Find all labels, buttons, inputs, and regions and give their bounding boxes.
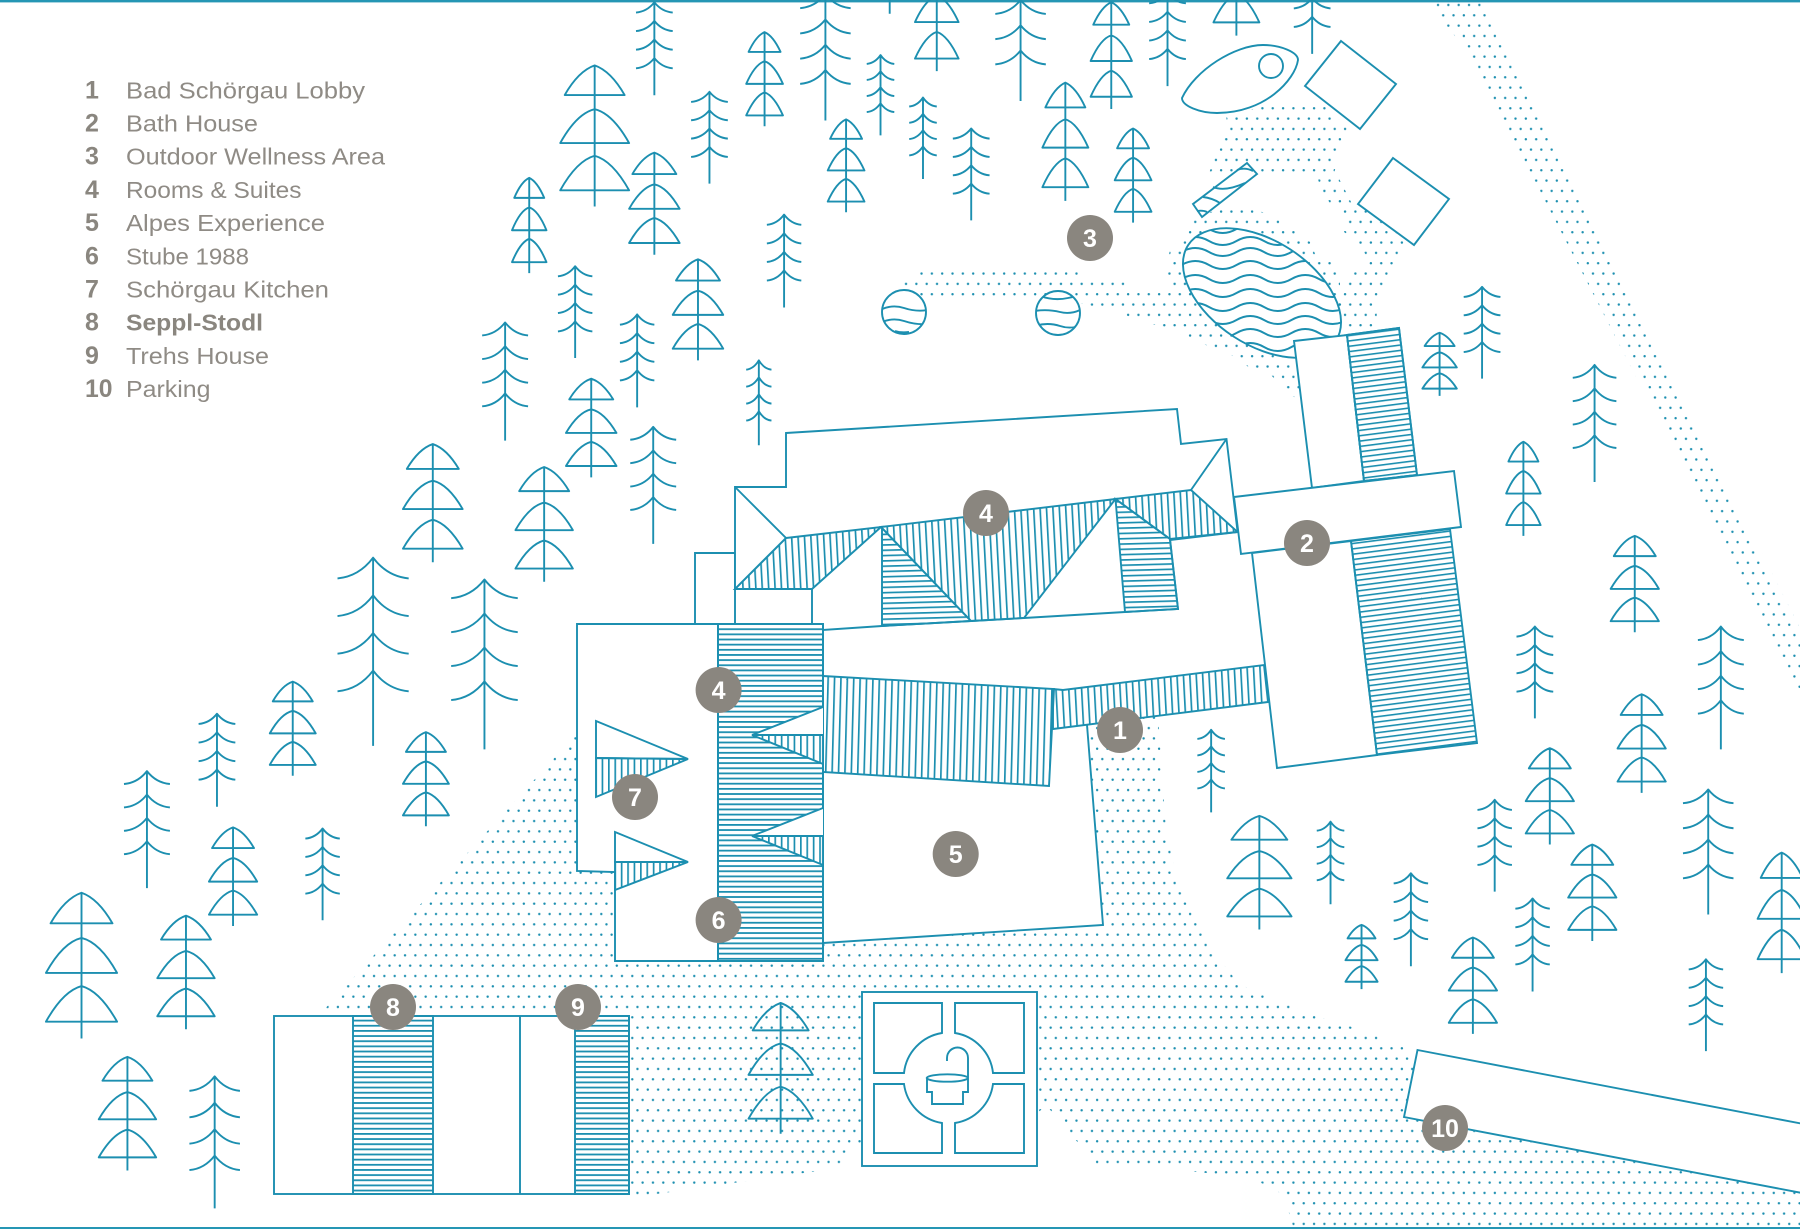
tree — [46, 893, 117, 1038]
hatched roof: west slope — [735, 527, 881, 589]
block outline — [274, 1016, 629, 1194]
tree — [1517, 627, 1553, 718]
tree — [673, 259, 723, 360]
icon: swimming pool with waves — [1182, 227, 1342, 359]
tree — [1515, 898, 1550, 991]
tree — [1683, 789, 1733, 915]
dotted path: lawn link to bath house — [1316, 173, 1405, 335]
garden bed: bottom left — [874, 1084, 942, 1153]
tree — [691, 92, 728, 184]
marker 5: 5 — [949, 841, 963, 869]
bottom border line — [0, 1227, 1800, 1229]
hatched roof: centre slope — [881, 499, 1116, 621]
legend row 8 — [85, 309, 263, 337]
legend row 5: 5 — [85, 209, 99, 237]
tree — [1115, 129, 1151, 223]
marker 3 — [1067, 215, 1113, 261]
icon: plunge trough — [1193, 163, 1257, 217]
tree — [403, 732, 449, 826]
legend row 9 — [85, 342, 269, 370]
legend row 5: Alpes Experience — [126, 210, 325, 236]
legend row 2 — [85, 110, 258, 138]
tree — [1317, 822, 1344, 904]
tree — [270, 682, 316, 776]
tree — [512, 178, 546, 273]
south wing white — [1252, 541, 1377, 768]
marker 6: 6 — [712, 907, 726, 935]
tree — [1449, 938, 1497, 1034]
roof notch upper — [752, 707, 823, 764]
tree — [199, 714, 235, 807]
outdoor wellness features — [880, 41, 1449, 385]
icon: square deck lower — [1358, 158, 1449, 245]
tree — [1698, 627, 1744, 749]
tree — [867, 55, 894, 135]
tree — [636, 2, 673, 95]
hip ridge lines — [735, 439, 1226, 589]
marker 4 lower — [696, 667, 742, 713]
tree — [1526, 748, 1574, 845]
tree — [1689, 959, 1723, 1051]
legend row 6: 6 — [85, 242, 99, 270]
dotted area: pool surroundings and path — [903, 209, 1340, 400]
tree — [1394, 873, 1428, 966]
tree — [515, 467, 573, 582]
tree — [1464, 287, 1500, 379]
legend row 1: Bad Schörgau Lobby — [126, 77, 366, 103]
legend row 6 — [85, 242, 249, 270]
marker 9: 9 — [571, 994, 585, 1022]
icon: leaf-shaped pond with island — [1182, 45, 1298, 113]
legend row 10: 10 — [85, 375, 112, 403]
icon: small round tub left — [880, 289, 928, 334]
legend row 8: Seppl-Stodl — [126, 310, 263, 336]
icon: square deck upper — [1305, 41, 1396, 129]
tree — [746, 360, 771, 445]
map markers — [370, 215, 1468, 1151]
tree — [1618, 694, 1666, 793]
marker 4 upper: 4 — [979, 500, 993, 528]
marker 2: 2 — [1300, 530, 1314, 558]
dotted area: upper outdoor lawn — [1209, 104, 1348, 173]
tree — [1758, 853, 1800, 973]
marker 4 upper — [963, 490, 1009, 536]
garden bed: top left — [874, 1003, 942, 1073]
tree — [828, 119, 864, 212]
garden bed: top right — [955, 1003, 1024, 1073]
marker 2 — [1284, 520, 1330, 566]
tree — [305, 828, 340, 920]
legend row 5 — [85, 209, 325, 237]
tree — [800, 0, 851, 120]
tree — [746, 32, 783, 126]
legend row 3: 3 — [85, 143, 99, 171]
hatched roof: lobby connector — [1053, 665, 1268, 729]
building: Seppl-Stodl and Trehs House — [274, 1016, 629, 1194]
tree — [995, 0, 1046, 101]
tree — [157, 916, 215, 1029]
south wing hatched roof — [1351, 529, 1477, 755]
parking lot — [1404, 1050, 1800, 1193]
tree — [1345, 925, 1378, 989]
legend row 2: 2 — [85, 110, 99, 138]
divider wall — [519, 1016, 521, 1194]
icon: fountain basin and spout — [927, 1048, 968, 1104]
tree — [1506, 442, 1541, 536]
legend row 10: Parking — [126, 376, 210, 402]
kitchen triangle lower — [615, 832, 688, 890]
building: Rooms and Suites wing — [695, 409, 1238, 630]
tree — [566, 379, 616, 477]
tree — [909, 98, 937, 179]
legend row 4: 4 — [85, 176, 99, 204]
Seppl-Stodl hatched roof — [353, 1016, 433, 1194]
top border line — [0, 0, 1800, 2]
tree — [1568, 845, 1616, 941]
kitchen triangle upper — [596, 721, 688, 797]
legend row 10 — [85, 375, 210, 403]
garden bed: bottom right — [955, 1084, 1024, 1153]
legend row 3: Outdoor Wellness Area — [126, 144, 385, 170]
main roof outline — [735, 409, 1238, 630]
building: Alpes Experience outline — [823, 725, 1103, 943]
legend row 2: Bath House — [126, 110, 258, 136]
tree — [1042, 83, 1088, 201]
hatched roof: gable east — [1116, 499, 1178, 612]
hatched roof: Alpes Experience — [823, 676, 1054, 786]
legend row 9: Trehs House — [126, 343, 269, 369]
legend row 9: 9 — [85, 342, 99, 370]
dotted area: main grounds and driveway — [322, 716, 1800, 1226]
tree — [1197, 730, 1225, 812]
legend row 7: 7 — [85, 276, 99, 304]
tree — [558, 266, 592, 358]
tree — [1477, 800, 1512, 892]
tree — [1213, 0, 1259, 36]
hatched roof: gable west — [882, 528, 971, 626]
north wing white — [1294, 335, 1364, 488]
cross bar — [1234, 471, 1461, 554]
legend row 4: Rooms & Suites — [126, 177, 302, 203]
marker 5 — [933, 831, 979, 877]
tree — [124, 771, 170, 888]
Trehs House hatched roof — [575, 1016, 629, 1194]
building: Bath House — [1234, 328, 1477, 768]
tree — [1091, 2, 1132, 109]
tree — [1422, 333, 1457, 396]
tree — [209, 827, 257, 926]
marker 7: 7 — [628, 784, 642, 812]
tree — [953, 129, 990, 220]
legend row 7 — [85, 276, 329, 304]
tree — [629, 153, 680, 255]
tree — [403, 444, 463, 562]
marker 8: 8 — [386, 994, 400, 1022]
legend row 1: 1 — [85, 76, 99, 104]
marker 1 — [1097, 707, 1143, 753]
marker 9 — [555, 984, 601, 1030]
icon: small round tub right — [1034, 291, 1084, 335]
annex block — [695, 553, 735, 624]
outer square — [862, 992, 1037, 1166]
marker 7 — [612, 774, 658, 820]
marker 10 — [1422, 1105, 1468, 1151]
tree — [767, 215, 801, 308]
marker 6 — [696, 897, 742, 943]
tree — [99, 1057, 156, 1170]
north wing hatched roof — [1347, 328, 1417, 481]
roof notch lower — [752, 808, 823, 865]
marker 1: 1 — [1113, 717, 1127, 745]
courtyard fountain — [862, 992, 1037, 1166]
legend row 8: 8 — [85, 309, 99, 337]
tree — [482, 322, 528, 441]
tree — [915, 0, 959, 71]
hatched roof: main — [718, 624, 823, 961]
tree — [1573, 365, 1616, 482]
tree — [560, 65, 629, 207]
tree — [1611, 536, 1659, 632]
legend — [85, 76, 385, 403]
tree — [630, 427, 676, 544]
marker 3: 3 — [1083, 225, 1097, 253]
building: Alpes Experience hall — [823, 700, 1103, 943]
tree — [620, 314, 654, 407]
white wing outline — [577, 624, 718, 961]
legend row 7: Schörgau Kitchen — [126, 276, 329, 302]
dotted path: right diagonal band — [1426, 0, 1800, 695]
marker 4 lower: 4 — [712, 677, 726, 705]
tree — [876, 0, 903, 14]
building: Kitchen and Stube wing — [577, 624, 823, 961]
tree — [1227, 816, 1292, 929]
hatched roof: east slope — [1116, 490, 1238, 539]
tree — [451, 579, 518, 749]
marker 10: 10 — [1431, 1115, 1459, 1143]
tree — [338, 558, 409, 746]
marker 8 — [370, 984, 416, 1030]
legend row 6: Stube 1988 — [126, 243, 249, 269]
tree — [1294, 0, 1331, 54]
tree — [1149, 0, 1186, 86]
tree — [189, 1076, 240, 1208]
tree — [748, 1003, 813, 1134]
